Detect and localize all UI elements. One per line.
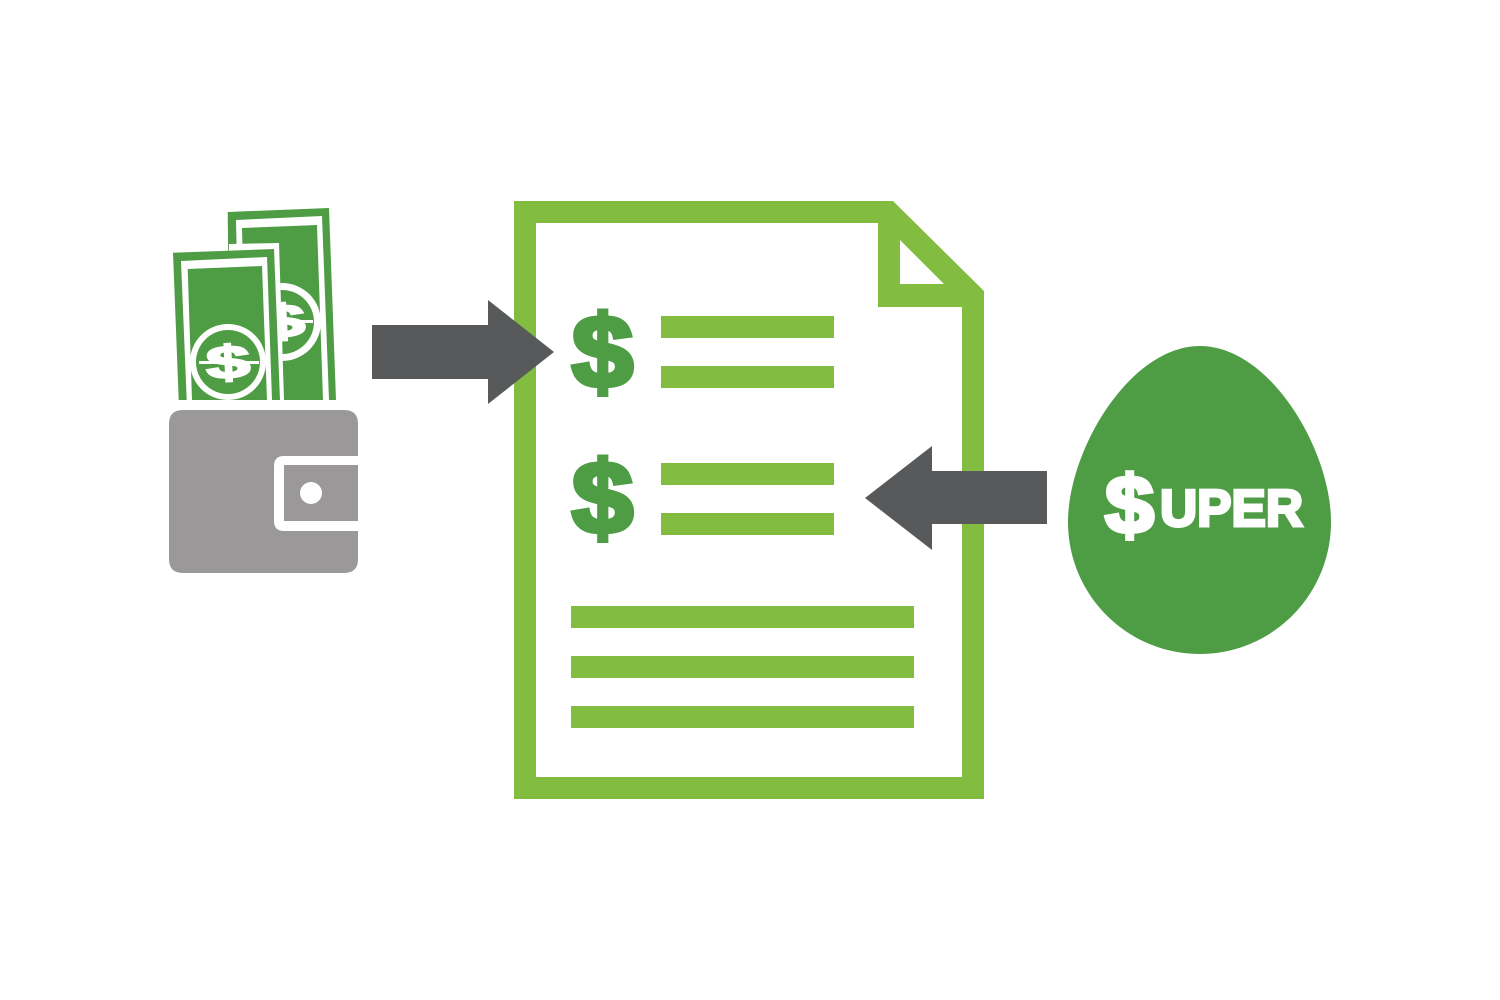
icon: wallet bbox=[169, 410, 358, 573]
super label bbox=[1105, 460, 1303, 551]
front coin bbox=[190, 324, 266, 400]
front coin: $ bbox=[205, 335, 251, 389]
back coin: $ bbox=[260, 294, 306, 348]
dollar line item 1 bbox=[572, 295, 834, 409]
icon: banknotes bbox=[173, 208, 336, 400]
arrow: wallet to document bbox=[372, 300, 554, 404]
text lines bbox=[571, 606, 914, 728]
super label: $ bbox=[1105, 460, 1154, 551]
document bbox=[514, 201, 984, 799]
back coin bbox=[280, 283, 320, 361]
dollar line item 1: $ bbox=[572, 295, 633, 409]
front banknote bbox=[173, 243, 284, 400]
arrow: super to document bbox=[865, 446, 1047, 550]
dollar line item 2 bbox=[572, 441, 834, 555]
dollar line item 2: $ bbox=[572, 441, 633, 555]
back banknote bbox=[228, 208, 336, 400]
wallet clasp bbox=[274, 456, 358, 531]
icon: super egg bbox=[1068, 346, 1331, 654]
super label: UPER bbox=[1160, 480, 1303, 538]
